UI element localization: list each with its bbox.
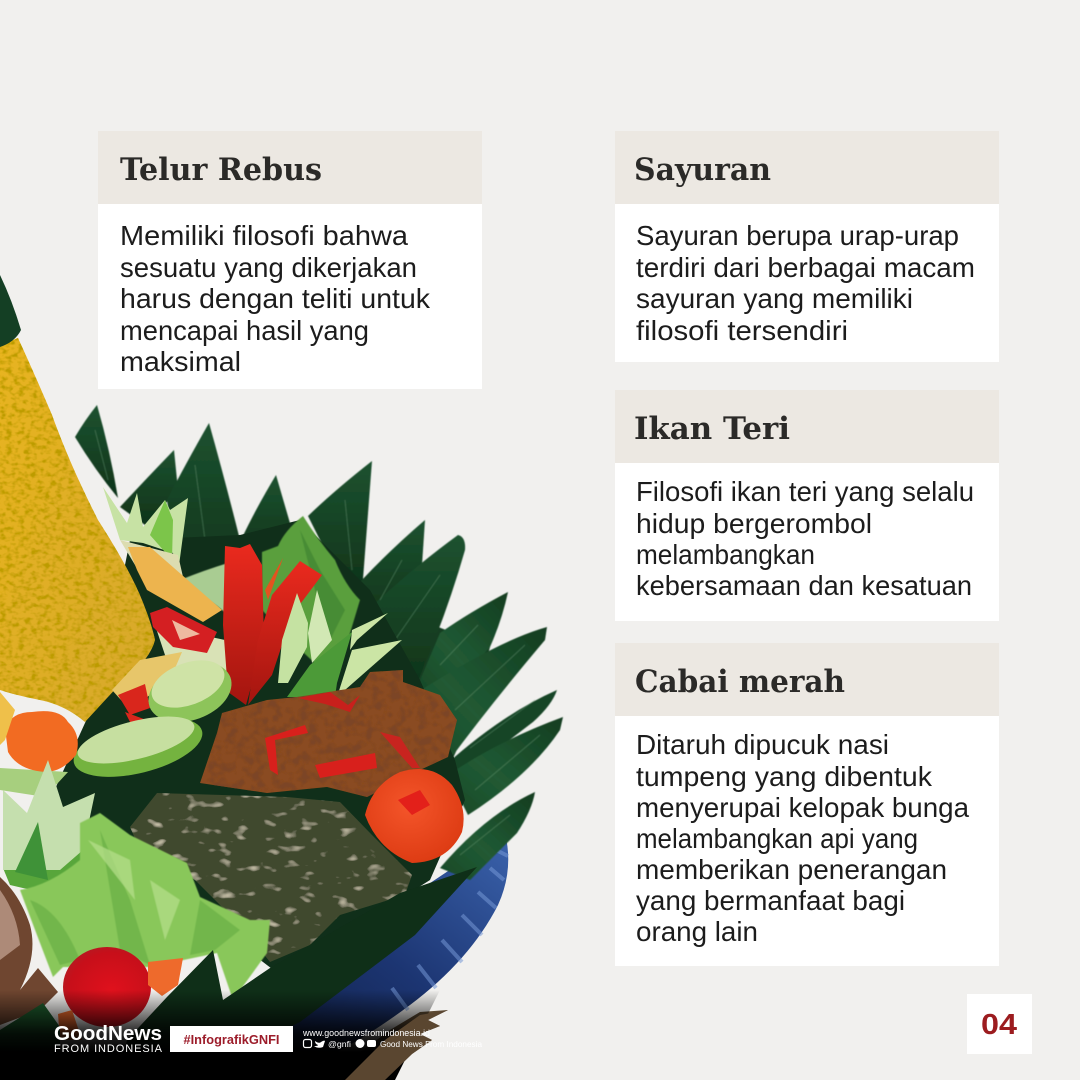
footer social links: Good News From Indonesia [380, 1039, 482, 1049]
footer social links [302, 1028, 482, 1049]
torn brown accent under the bowl [330, 1010, 448, 1080]
description: Memiliki filosofi bahwa [120, 220, 408, 251]
description: memberikan penerangan [636, 854, 947, 885]
brown dish at left [0, 877, 58, 1025]
description: filosofi tersendiri [636, 315, 848, 346]
description: yang bermanfaat bagi [636, 885, 905, 916]
top lettuce [180, 516, 360, 668]
big lettuce [20, 813, 270, 1000]
tempeh sambal goreng [200, 670, 457, 797]
cucumber slices left [0, 651, 240, 797]
description: Filosofi ikan teri yang selalu [636, 476, 974, 507]
panel: Telur Rebus [98, 131, 482, 389]
body panel [615, 204, 999, 362]
urap vegetables [130, 793, 412, 962]
description [636, 220, 975, 346]
body panel [615, 463, 999, 621]
cucumber garnish upper left [103, 487, 188, 573]
heading: Cabai merah [635, 664, 845, 700]
egg strips [112, 540, 232, 710]
icon: instagram [304, 1040, 312, 1048]
description [636, 729, 969, 947]
dark shadow backdrop under the garnish [50, 520, 465, 975]
footer logo: GoodNews from Indonesia [54, 1023, 163, 1055]
description: Sayuran berupa urap-urap [636, 220, 959, 251]
description: sesuatu yang dikerjakan [120, 252, 417, 283]
description: kebersamaan dan kesatuan [636, 570, 972, 601]
footer logo: GoodNews from Indonesia: GoodNews [54, 1023, 162, 1045]
tomato rose [365, 769, 464, 863]
description: terdiri dari berbagai macam [636, 252, 975, 283]
description: harus dengan teliti untuk [120, 283, 431, 314]
yellow rice cone [0, 338, 155, 722]
cucumber crown left [3, 760, 95, 880]
page number [967, 994, 1032, 1054]
red tomato rose bottom [58, 947, 183, 1040]
description [120, 220, 431, 377]
heading: Sayuran [634, 152, 771, 188]
description: melambangkan [636, 539, 815, 570]
chili strips on tempeh [265, 692, 420, 778]
torn brown accent over fade [345, 1010, 448, 1080]
panel: Cabai merah [615, 643, 999, 966]
icon: twitter [314, 1041, 325, 1048]
heading: Telur Rebus [120, 152, 322, 188]
body panel [98, 204, 482, 389]
description: maksimal [120, 346, 241, 377]
icon: facebook [356, 1039, 364, 1048]
footer social links: www.goodnewsfromindonesia.id [302, 1028, 430, 1038]
footer social links: @gnfi [328, 1039, 351, 1049]
icon: youtube [367, 1040, 376, 1047]
fried egg strip left [0, 692, 15, 745]
heading band [615, 390, 999, 463]
red chili flowers [118, 544, 322, 727]
description: mencapai hasil yang [120, 315, 369, 346]
description: tumpeng yang dibentuk [636, 761, 933, 792]
body panel [615, 716, 999, 966]
description: Ditaruh dipucuk nasi [636, 729, 889, 760]
description: menyerupai kelopak bunga [636, 792, 969, 823]
food illustration: tumpeng on banana leaves [0, 275, 563, 1080]
bowl: blue woven basket [200, 833, 508, 1080]
cucumber garnish centre [278, 590, 402, 697]
panel: Sayuran [615, 131, 999, 362]
page number: 04 [981, 1009, 1017, 1041]
footer logo: GoodNews from Indonesia: FROM INDONESIA [54, 1043, 163, 1055]
heading band [615, 131, 999, 204]
dark fade at the bottom [0, 990, 440, 1080]
description: orang lain [636, 916, 758, 947]
leaf tip on cone [0, 275, 21, 347]
heading band [615, 643, 999, 716]
description: hidup bergerombol [636, 508, 872, 539]
small lettuce under crown [3, 850, 88, 892]
heading: Ikan Teri [634, 411, 790, 447]
carrot flower [5, 711, 78, 772]
description: sayuran yang memiliki [636, 283, 913, 314]
heading band [98, 131, 482, 204]
description [636, 476, 974, 601]
footer hashtag badge: #InfografikGNFI [184, 1033, 280, 1047]
banana leaves fan [75, 405, 563, 880]
footer hashtag badge [170, 1026, 293, 1052]
description: melambangkan api yang [636, 823, 918, 854]
panel: Ikan Teri [615, 390, 999, 621]
leaf folds at the rim [0, 867, 477, 1070]
